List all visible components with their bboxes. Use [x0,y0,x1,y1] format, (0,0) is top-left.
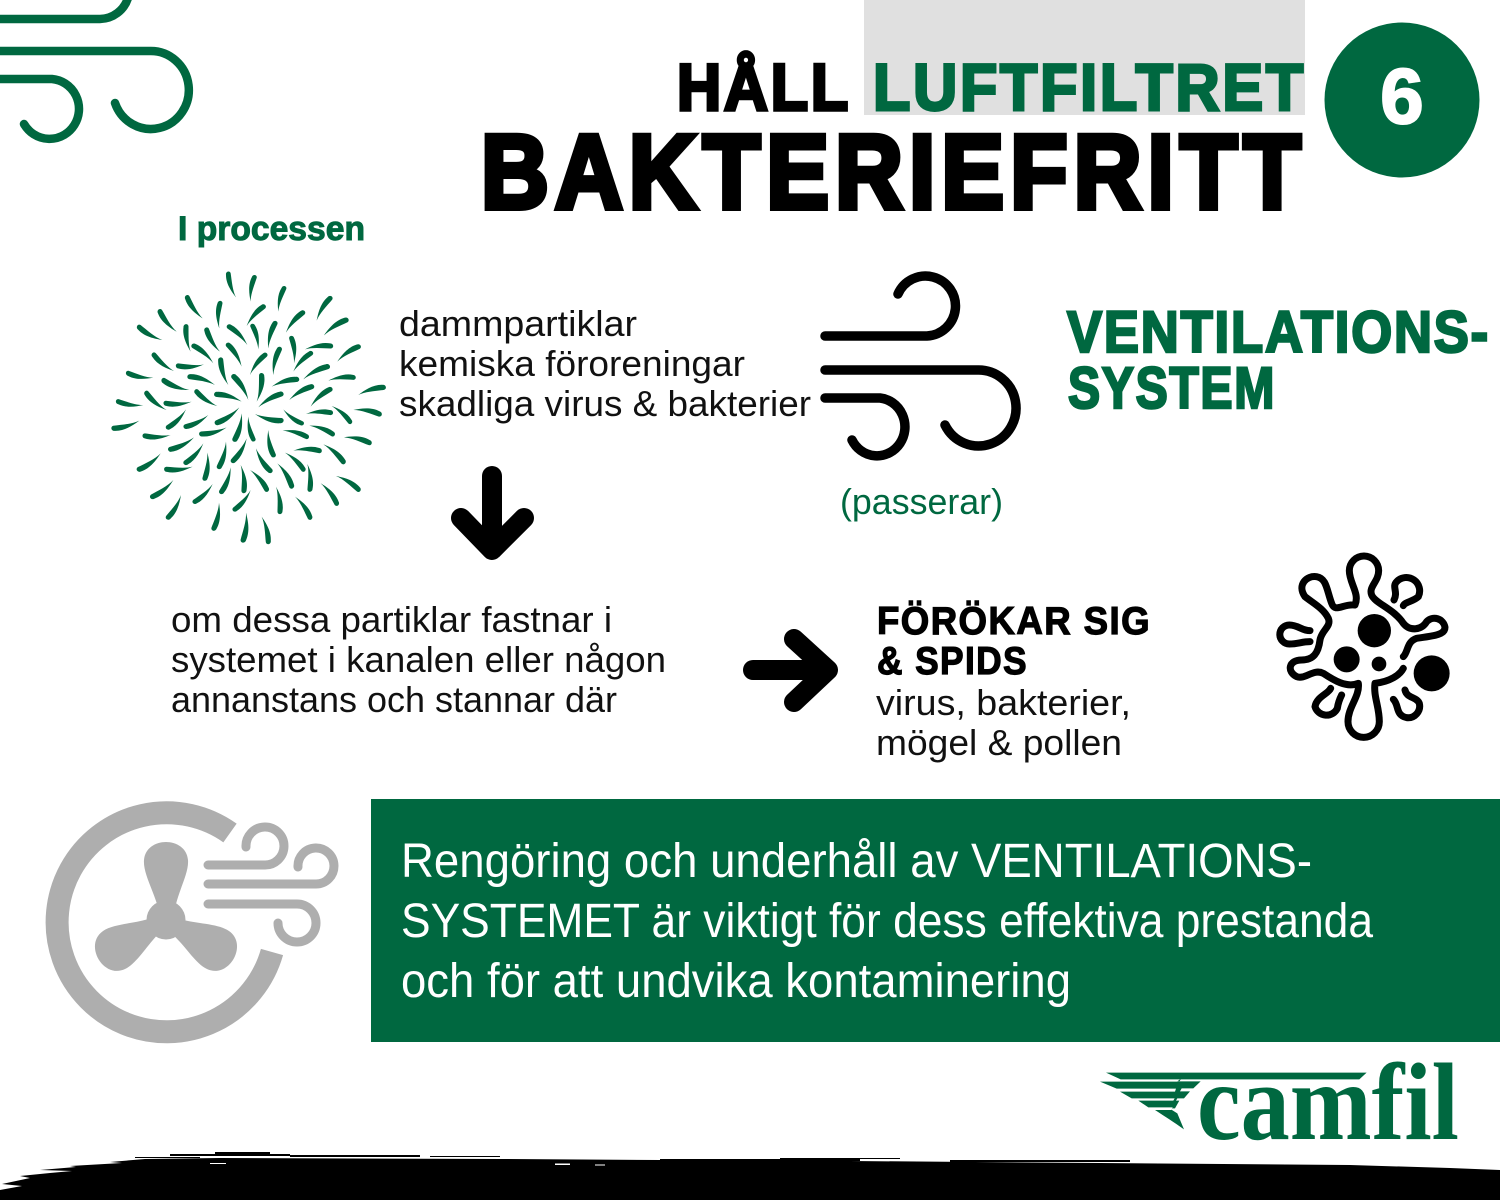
text: particle list [399,303,811,424]
arrow: down [461,476,524,550]
title [481,0,1307,231]
decoration: black brush stroke [0,1152,1500,1200]
text: condition: annanstans och stannar där [171,679,617,720]
icon: grey fan with wind [57,813,334,1032]
title: BAKTERIEFRITT [481,114,1307,231]
icon: wind black [825,276,1016,456]
panel: call to action [371,799,1500,1042]
text: particle list: kemiska föroreningar [399,343,745,384]
panel: call to action: och för att undvika kontaminering [401,955,1071,1008]
text: condition: systemet i kanalen eller någon [171,639,666,680]
text: multiplies and spreads: & SPIDS [877,640,1028,683]
badge: number 6: 6 [1380,52,1424,140]
text: multiplies and spreads [876,600,1151,763]
text: condition [171,599,666,720]
logo: camfil [1100,1041,1459,1163]
panel: call to action: SYSTEMET är viktigt för dess effektiva prestanda [401,895,1373,948]
text: multiplies and spreads: virus, bakterier, [876,682,1131,723]
heading: I processen: I processen [178,210,365,248]
text: multiplies and spreads: FÖRÖKAR SIG [877,600,1151,643]
text: multiplies and spreads: mögel & pollen [876,722,1122,763]
label: passerar: (passerar) [840,481,1003,522]
title: HÅLL [677,50,851,124]
logo: camfil: camfil [1197,1041,1459,1163]
icon: particle burst [111,271,387,545]
icon: wind top left [0,0,189,139]
title: LUFTFILTRET [873,50,1306,124]
badge: number 6 [1324,22,1480,178]
decoration: brush scratches [210,1163,605,1166]
panel: call to action: Rengöring och underhåll av VENTILATIONS- [401,835,1312,888]
arrow: right [753,639,828,702]
text: particle list: dammpartiklar [399,303,637,344]
heading: ventilationssystem: SYSTEM [1068,356,1276,421]
text: condition: om dessa partiklar fastnar i [171,599,612,640]
heading: ventilationssystem [1067,300,1490,421]
text: particle list: skadliga virus & bakterier [399,383,811,424]
icon: virus [1280,556,1450,737]
